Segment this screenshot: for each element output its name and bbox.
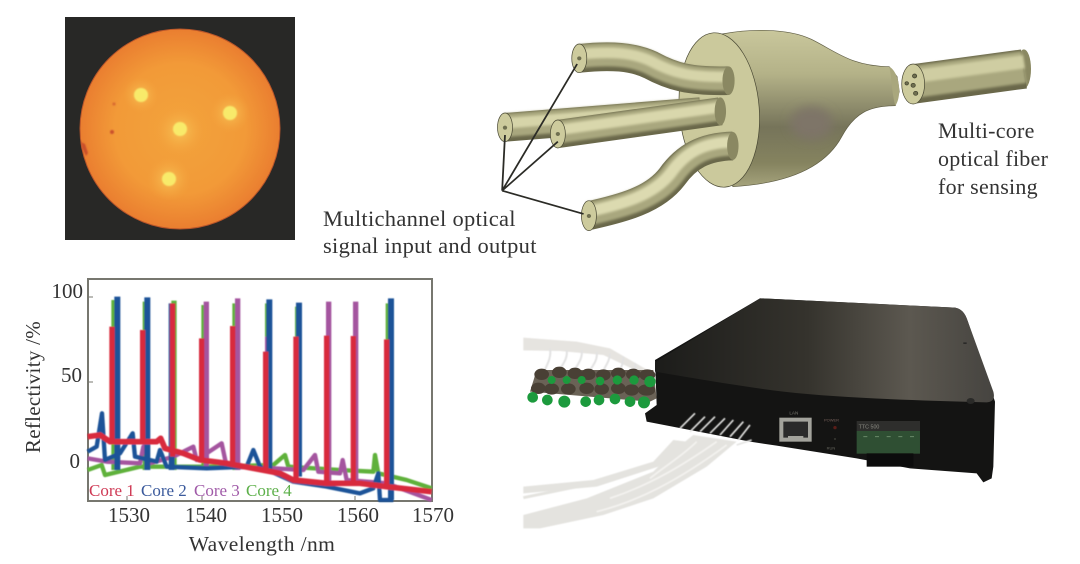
edge defects (81, 102, 116, 156)
tapered body (722, 30, 899, 187)
body shadow (790, 107, 833, 140)
optical connectors (527, 367, 657, 408)
core 1 trace (88, 303, 432, 492)
axis ticks (88, 297, 355, 501)
green caps (527, 375, 656, 408)
y axis values: 0 (70, 449, 80, 473)
mounting tab (963, 342, 975, 404)
device top face (655, 298, 994, 402)
plot frame (88, 279, 432, 501)
connector bodies (530, 367, 657, 402)
bottom input tube (581, 132, 739, 231)
input label: Multichannel optical (323, 206, 516, 231)
input label: signal input and output (323, 233, 537, 258)
sensing fiber label: for sensing (938, 174, 1038, 199)
fiber cladding disc (80, 29, 280, 229)
LAN port (779, 410, 812, 442)
panel: interrogator device photo (523, 298, 995, 528)
x axis values: 1530 (108, 503, 150, 527)
x axis values: 1540 (185, 503, 227, 527)
sensing fiber (902, 49, 1031, 104)
y axis values: 50 (61, 363, 82, 387)
x axis values: 1550 (261, 503, 303, 527)
panel: reflectivity spectrum chart (21, 279, 454, 556)
y axis values: 100 (52, 279, 83, 303)
upper fiber bundle (523, 338, 652, 377)
x axis values: 1560 (337, 503, 379, 527)
core 3 trace (88, 298, 432, 500)
legend: Core 3 (194, 481, 240, 500)
y axis title: Reflectivity /% (21, 321, 45, 453)
panel: fiber cross-section micrograph (65, 17, 295, 240)
input end disc (674, 30, 765, 190)
sensing fiber label: Multi-core (938, 118, 1035, 143)
back input tube (497, 108, 701, 142)
core halos (123, 77, 250, 201)
panel: fan-in/fan-out device diagram (323, 30, 1049, 258)
four fiber cores (134, 88, 237, 186)
x axis title: Wavelength /nm (189, 532, 335, 556)
legend (89, 481, 292, 500)
status indicators: RUN (827, 446, 835, 451)
LAN port: LAN (789, 410, 798, 415)
status indicators (824, 418, 839, 451)
core 2 trace (88, 297, 393, 500)
device housing (645, 298, 995, 482)
spectrum traces (88, 297, 432, 500)
status indicators: POWER (824, 418, 839, 423)
x axis values: 1570 (412, 503, 454, 527)
front input tube (550, 97, 726, 148)
lower fiber bundle (523, 413, 752, 528)
leader lines (502, 64, 584, 214)
y axis values (52, 279, 83, 473)
legend: Core 4 (246, 481, 292, 500)
neck end highlight (889, 67, 899, 106)
top input tube (572, 44, 735, 95)
core 4 trace (88, 300, 432, 488)
power terminal block: TTC 500 (859, 424, 879, 430)
x axis values (108, 503, 454, 527)
legend: Core 1 (89, 481, 135, 500)
fan-out drawing (497, 30, 1031, 231)
power terminal block (857, 421, 920, 467)
sensing fiber label: optical fiber (938, 146, 1049, 171)
legend: Core 2 (141, 481, 187, 500)
